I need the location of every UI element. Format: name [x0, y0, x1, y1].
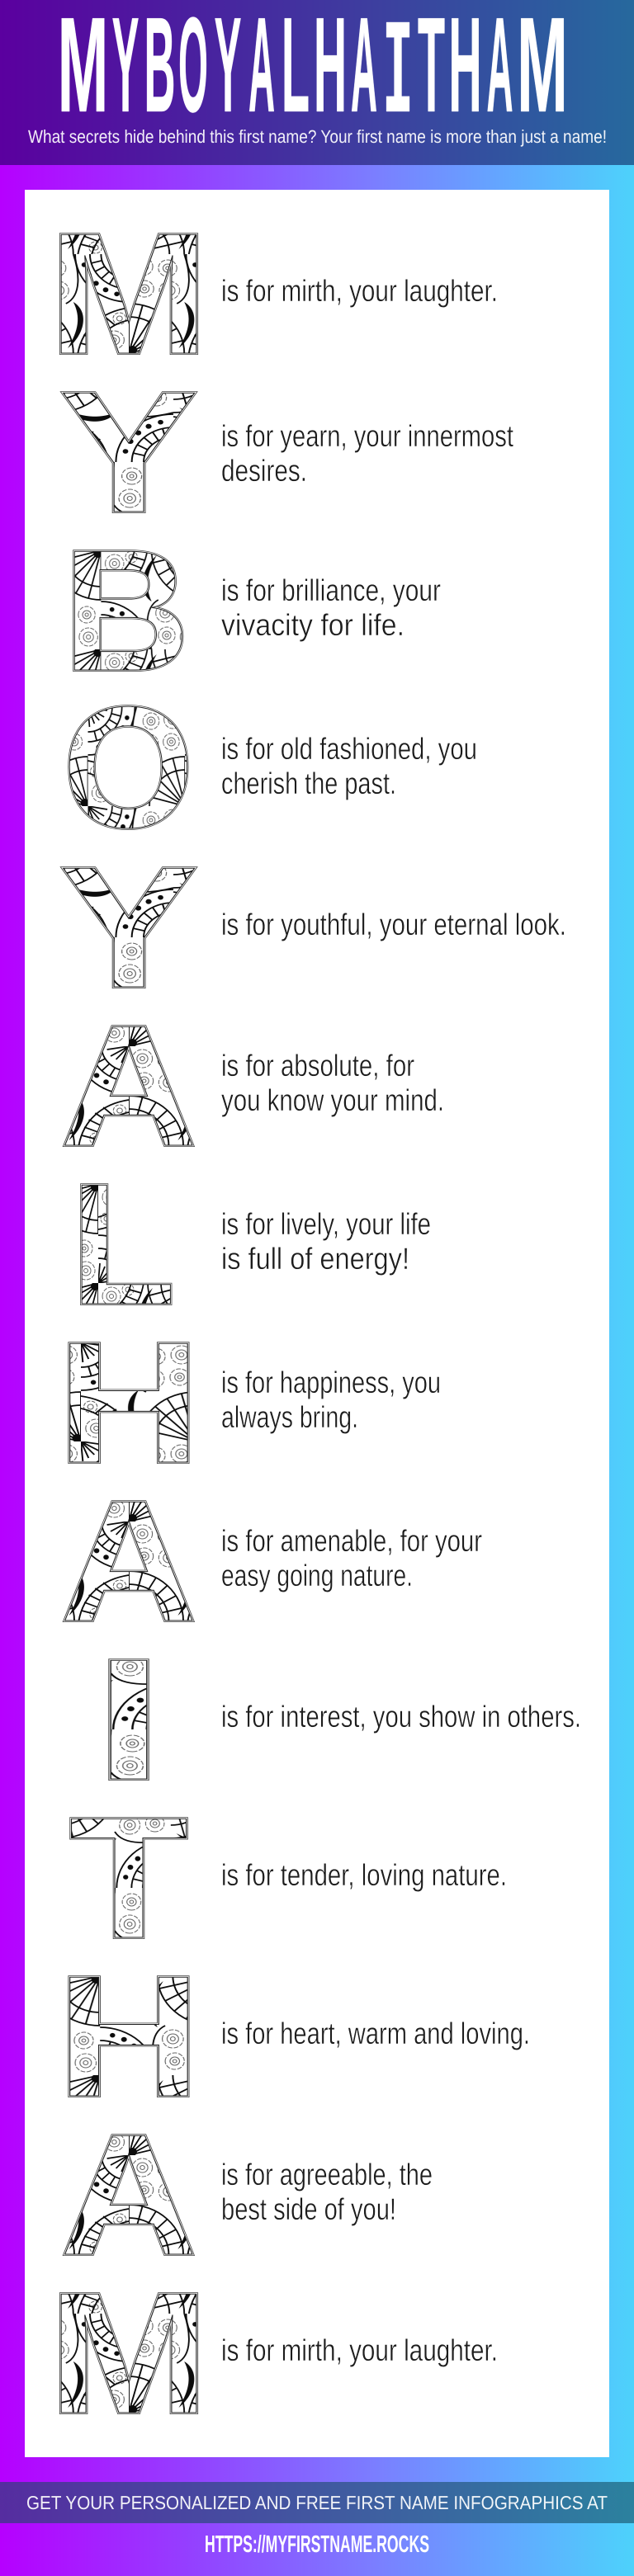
- text Y: is for yearn, your innermost: [221, 419, 514, 453]
- row: A agreeable: [60, 2099, 433, 2291]
- letter A: A: [60, 1465, 197, 1658]
- row: M mirth: [48, 2258, 498, 2450]
- text A: is for absolute, for: [221, 1049, 414, 1083]
- footer url: HTTPS://MYFIRSTNAME.ROCKS: [205, 2531, 429, 2558]
- text T: is for tender, loving nature.: [221, 1858, 507, 1892]
- letter B: B: [63, 515, 190, 707]
- row: A amenable: [60, 1465, 482, 1658]
- letter L: L: [70, 1149, 176, 1341]
- text A: [221, 2158, 433, 2226]
- letter L: L: [70, 1149, 176, 1341]
- text M: is for mirth, your laughter.: [221, 274, 498, 308]
- text B: vivacity for life.: [221, 608, 405, 642]
- row: Y yearn: [59, 356, 514, 549]
- letter H: H: [56, 1941, 201, 2133]
- letter O: O: [63, 672, 194, 864]
- text O: is for old fashioned, you: [221, 732, 477, 766]
- letter A: A: [60, 990, 197, 1182]
- text O: cherish the past.: [221, 767, 396, 800]
- letter T: T: [69, 1782, 188, 1974]
- letter A: A: [60, 2099, 197, 2291]
- letter I: I: [94, 1624, 163, 1816]
- row: H happiness: [56, 1307, 441, 1499]
- text B: is for brilliance, your: [221, 573, 441, 607]
- text A: you know your mind.: [221, 1083, 444, 1117]
- letter Y: Y: [59, 356, 198, 549]
- row: I interest: [94, 1624, 581, 1816]
- letter B: B: [63, 515, 190, 707]
- letter I: I: [94, 1624, 163, 1816]
- text A: easy going nature.: [221, 1559, 413, 1592]
- letter M: M: [48, 2258, 210, 2450]
- letter A: A: [60, 2099, 197, 2291]
- text H: always bring.: [221, 1400, 358, 1434]
- text A: [221, 1049, 444, 1117]
- letter A: A: [60, 990, 197, 1182]
- letter A: A: [60, 2099, 197, 2291]
- text O: [221, 732, 477, 800]
- letter M: M: [48, 198, 210, 390]
- row: A absolute: [60, 990, 444, 1182]
- letter H: H: [56, 1307, 201, 1499]
- letter H: H: [56, 1307, 201, 1499]
- text H: is for heart, warm and loving.: [221, 2017, 530, 2050]
- text Y: [221, 419, 514, 488]
- text M: is for mirth, your laughter.: [221, 2333, 498, 2367]
- header band: [0, 0, 634, 165]
- letter Y: Y: [59, 832, 198, 1024]
- title: I: [382, 0, 414, 153]
- letter M: M: [48, 198, 210, 390]
- letter Y: Y: [59, 832, 198, 1024]
- text L: [221, 1207, 431, 1276]
- row: T tender: [69, 1782, 507, 1974]
- row: B brilliance: [63, 515, 441, 707]
- text B: [221, 573, 441, 642]
- text A: [221, 1524, 482, 1592]
- text L: is full of energy!: [221, 1242, 409, 1276]
- letter O: O: [63, 672, 194, 864]
- letter M: M: [48, 2258, 210, 2450]
- text A: best side of you!: [221, 2192, 396, 2226]
- letter I: I: [94, 1624, 163, 1816]
- row: L lively: [70, 1149, 431, 1341]
- letter A: A: [60, 1465, 197, 1658]
- text H: is for happiness, you: [221, 1366, 441, 1399]
- text Y: desires.: [221, 454, 307, 488]
- letter L: L: [70, 1149, 176, 1341]
- letter T: T: [69, 1782, 188, 1974]
- letter A: A: [60, 1465, 197, 1658]
- text H: [221, 1366, 441, 1434]
- footer band: [0, 2482, 634, 2523]
- row: M mirth: [48, 198, 498, 390]
- letter A: A: [60, 990, 197, 1182]
- letter M: M: [48, 198, 210, 390]
- letter H: H: [56, 1307, 201, 1499]
- letter B: B: [63, 515, 190, 707]
- letter H: H: [56, 1941, 201, 2133]
- letter O: O: [63, 672, 194, 864]
- letter T: T: [69, 1782, 188, 1974]
- row: O old fashioned: [63, 672, 477, 864]
- letter M: M: [48, 2258, 210, 2450]
- text A: is for agreeable, the: [221, 2158, 433, 2191]
- row: Y youthful: [59, 832, 566, 1024]
- letter Y: Y: [59, 356, 198, 549]
- text L: is for lively, your life: [221, 1207, 431, 1241]
- row: H heart: [56, 1941, 530, 2133]
- letter H: H: [56, 1941, 201, 2133]
- title: [58, 0, 568, 153]
- text A: is for amenable, for your: [221, 1524, 482, 1558]
- letter Y: Y: [59, 832, 198, 1024]
- letter Y: Y: [59, 356, 198, 549]
